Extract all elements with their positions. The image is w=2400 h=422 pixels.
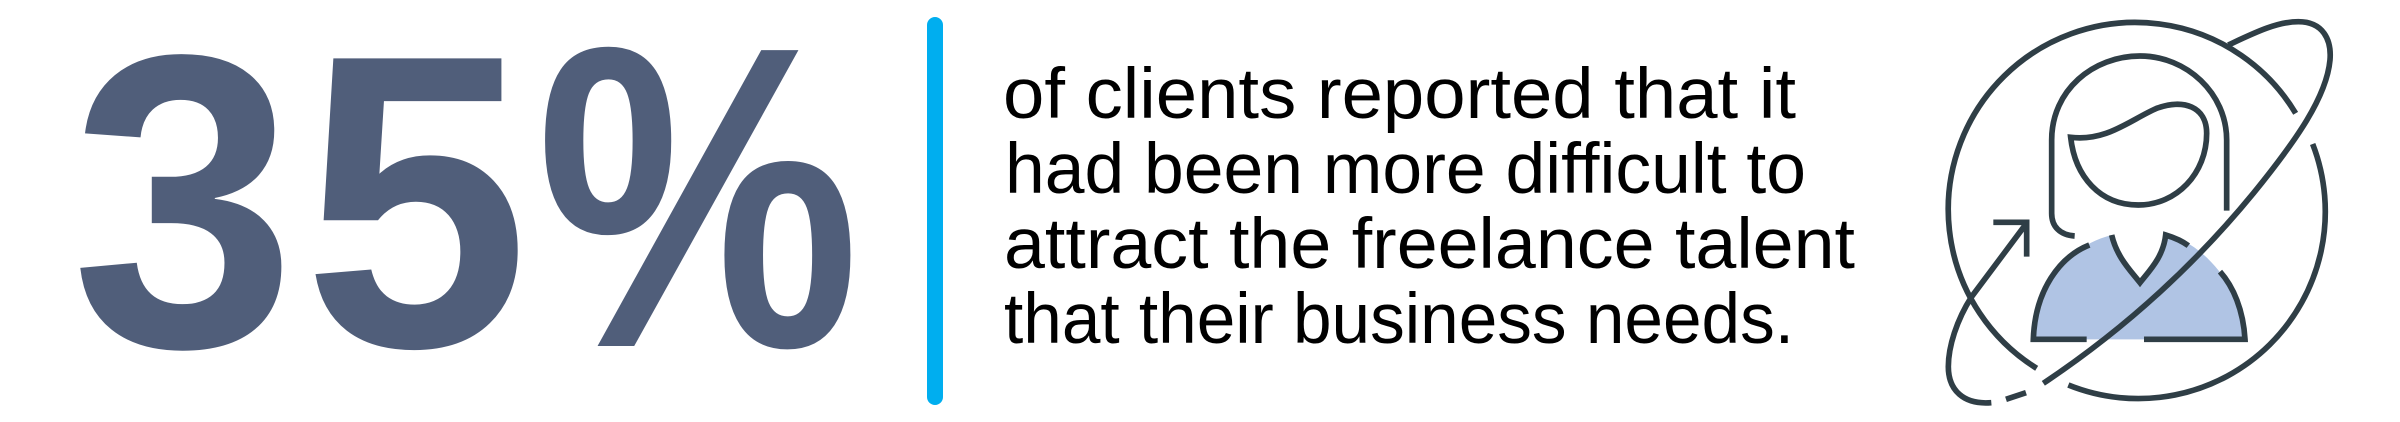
icon: freelancer with globe orbit xyxy=(1948,22,2330,403)
description text: of clients reported that it xyxy=(1003,55,1796,134)
icon: body outline xyxy=(2033,235,2245,339)
description text: had been more difficult to xyxy=(1005,130,1806,209)
description text: attract the freelance talent xyxy=(1004,205,1855,284)
icon: hair xyxy=(2052,56,2227,236)
icon: arrow xyxy=(1948,222,2027,403)
icon: orbit xyxy=(2043,22,2330,383)
icon: globe circle xyxy=(1948,22,2325,399)
icon: face xyxy=(2071,104,2207,205)
big statistic: 35% xyxy=(71,0,860,422)
vertical divider xyxy=(927,17,943,405)
description text: that their business needs. xyxy=(1004,280,1794,359)
description text xyxy=(1003,55,1855,359)
icon: body fill xyxy=(2033,235,2245,339)
